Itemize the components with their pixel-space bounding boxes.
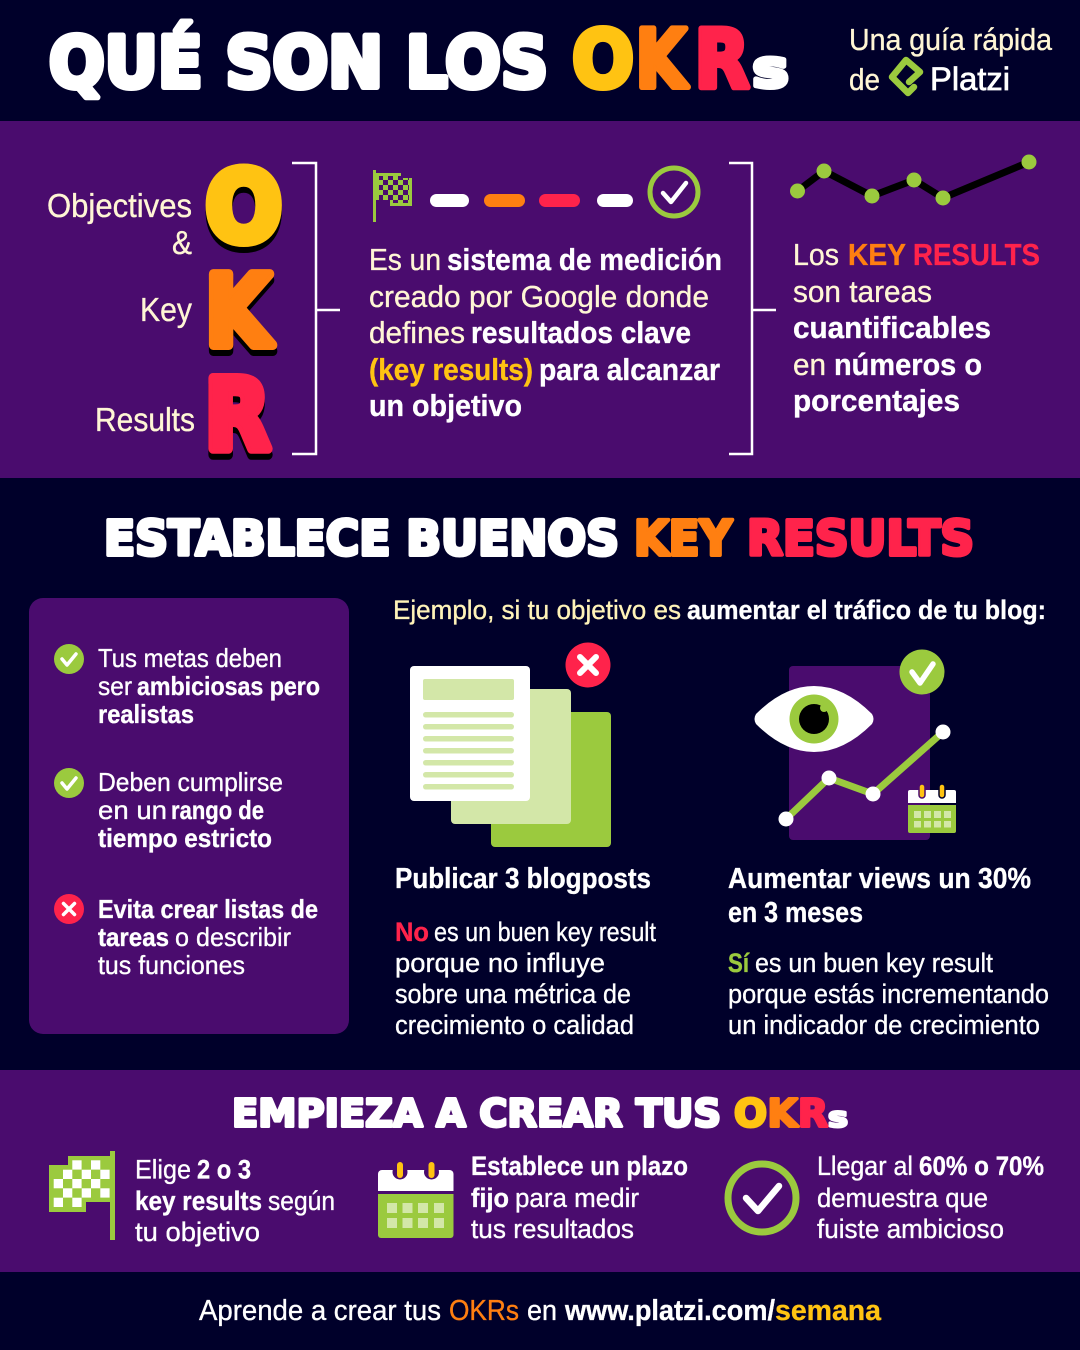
text: key results description: en [793, 347, 826, 382]
byline: Una guía rápida de Platzi: de [849, 62, 880, 97]
footer call to action: semana [775, 1295, 882, 1327]
big OKR letters: R [205, 359, 270, 472]
text: tip 2 [98, 767, 283, 853]
text: step 1: tu objetivo [135, 1217, 260, 1247]
icon: small calendar [908, 784, 956, 833]
bracket: OKR to definition [292, 163, 340, 454]
text: definition paragraph: defines [369, 315, 465, 350]
icon: large check ring [728, 1164, 796, 1232]
footer call to action: en [527, 1295, 557, 1327]
icon: green check badge [900, 650, 944, 694]
icon: green check 2 [54, 768, 84, 798]
text: tip 3: tus funciones [98, 950, 245, 980]
text: good example: es un buen key result [755, 948, 993, 978]
bracket: definition to key results [729, 163, 776, 454]
icon: red cross badge [566, 642, 610, 688]
heading: Empieza a crear tus OKRs: K [768, 1092, 799, 1136]
text: tip 3: o describir [175, 922, 291, 952]
big OKR letters: O [206, 151, 282, 264]
footer call to action: www.platzi.com/ [564, 1295, 775, 1327]
text: step 2: fijo [471, 1183, 509, 1213]
text: key results description: cuantificables [793, 310, 991, 345]
text: tip 2: rango de [171, 795, 264, 825]
icon: check ring [650, 168, 698, 216]
title: QUÉ SON LOS [49, 22, 548, 104]
text: example intro: aumentar el tráfico de tu blog: [687, 595, 1046, 625]
text: key results description: porcentajes [793, 383, 960, 418]
text: step 3: 60% o 70% [919, 1151, 1044, 1181]
text: definition paragraph: un objetivo [369, 388, 522, 423]
text: bad example: crecimiento o calidad [395, 1010, 634, 1040]
panel: bottom purple band [0, 1070, 1080, 1272]
text: definition paragraph: para alcanzar [539, 352, 720, 387]
text: bad example: porque no influye [395, 948, 605, 978]
text: step 2 [471, 1151, 688, 1244]
OKR words labels: Key [140, 291, 192, 328]
text: step 3 [817, 1151, 1044, 1244]
icon: red cross [54, 894, 84, 924]
text: definition paragraph: creado por Google donde [369, 279, 709, 314]
heading: Empieza a crear tus OKRs: R [798, 1092, 828, 1136]
byline: Una guía rápida de Platzi: Platzi [930, 61, 1010, 97]
text: definition paragraph [369, 242, 722, 423]
title: K [636, 13, 689, 106]
icon: documents [410, 642, 611, 847]
OKR words labels: Objectives [47, 187, 192, 224]
text: step 1: según [268, 1186, 335, 1216]
text: definition paragraph: Es un [369, 242, 441, 277]
OKR words labels: Results [95, 401, 195, 438]
icon row: flag, dashes, check [373, 168, 698, 222]
title: O [572, 14, 634, 106]
text: step 2: para medir [515, 1183, 639, 1213]
heading: Establece buenos key results [104, 511, 974, 567]
byline: Una guía rápida de Platzi [849, 22, 1053, 97]
OKR words labels: & [172, 224, 192, 261]
big OKR letters [205, 151, 282, 472]
icon: large calendar [378, 1162, 454, 1238]
text: key results description: RESULTS [913, 237, 1040, 272]
text: definition paragraph: (key results) [369, 352, 533, 387]
text: tip 2: tiempo estricto [98, 823, 272, 853]
icon: small flag [373, 170, 412, 222]
text: step 2: tus resultados [471, 1214, 634, 1244]
title [49, 13, 788, 106]
text: good example: porque estás incrementando [728, 979, 1049, 1009]
text: bad example: sobre una métrica de [395, 979, 631, 1009]
text: key results description: KEY [848, 237, 906, 272]
text: good example: un indicador de crecimiento [728, 1010, 1040, 1040]
growth line [778, 724, 950, 826]
text: step 1: 2 o 3 [197, 1154, 251, 1184]
eye [754, 686, 874, 752]
text: tip 1: realistas [98, 699, 194, 729]
text: step 2: Establece un plazo [471, 1151, 688, 1181]
text: step 3: demuestra que [817, 1183, 988, 1213]
footer call to action: Aprende a crear tus [199, 1295, 441, 1327]
text: definition paragraph: sistema de medición [447, 242, 722, 277]
title: s [752, 40, 788, 100]
icon: eye with growth chart [754, 650, 956, 840]
text: bad example: es un buen key result [434, 917, 656, 947]
text: tip 1: ser [98, 671, 132, 701]
text: key results description [793, 237, 1040, 418]
OKR words labels [47, 187, 195, 438]
text: step 3: fuiste ambicioso [817, 1214, 1004, 1244]
text: tip 2: Deben cumplirse [98, 767, 283, 797]
text: good example [728, 863, 1049, 1040]
text: tip 1: ambiciosas pero [137, 671, 320, 701]
text: definition paragraph: resultados clave [471, 315, 691, 350]
text: bad example: No [395, 917, 429, 947]
panel: top purple band [0, 121, 1080, 478]
footer call to action: OKRs [449, 1295, 519, 1327]
text: tip 1 [98, 643, 320, 729]
text: key results description: números o [834, 347, 982, 382]
text: tip 1: Tus metas deben [98, 643, 282, 673]
panel: tips [29, 598, 349, 1034]
text: example intro: Ejemplo, si tu objetivo es [393, 595, 681, 625]
title: R [694, 13, 750, 106]
text: tip 3 [98, 894, 318, 980]
heading: Establece buenos key results: KEY [634, 511, 733, 567]
text: tip 3: tareas [98, 922, 169, 952]
big OKR letters: K [206, 255, 274, 368]
dashes [430, 194, 633, 207]
heading: Establece buenos key results: RESULTS [747, 511, 974, 567]
text: good example: Sí [728, 948, 750, 978]
heading: Empieza a crear tus OKRs: O [734, 1092, 767, 1136]
text: step 3: Llegar al [817, 1151, 913, 1181]
heading: Empieza a crear tus OKRs: EMPIEZA A CREAR TUS [232, 1092, 721, 1136]
text: step 1: key results [135, 1186, 262, 1216]
heading: Empieza a crear tus OKRs: s [828, 1100, 848, 1134]
icon: line chart [790, 154, 1036, 206]
footer call to action [199, 1295, 882, 1327]
heading: Establece buenos key results: ESTABLECE BUENOS [104, 511, 619, 567]
text: bad example [395, 863, 656, 1040]
text: step 1: Elige [135, 1154, 191, 1184]
text: good example: en 3 meses [728, 897, 863, 929]
text: example intro [393, 595, 1046, 625]
text: bad example: Publicar 3 blogposts [395, 863, 651, 895]
text: tip 3: Evita crear listas de [98, 894, 318, 924]
byline: Una guía rápida de Platzi: Una guía rápida [849, 22, 1053, 57]
text: tip 2: en un [98, 795, 167, 825]
icon: Platzi logo [892, 60, 920, 93]
icon: green check 1 [54, 644, 84, 674]
text: key results description: son tareas [793, 274, 932, 309]
text: key results description: Los [793, 237, 839, 272]
icon: large flag [49, 1151, 115, 1240]
text: good example: Aumentar views un 30% [728, 863, 1031, 895]
text: step 1 [135, 1154, 335, 1247]
